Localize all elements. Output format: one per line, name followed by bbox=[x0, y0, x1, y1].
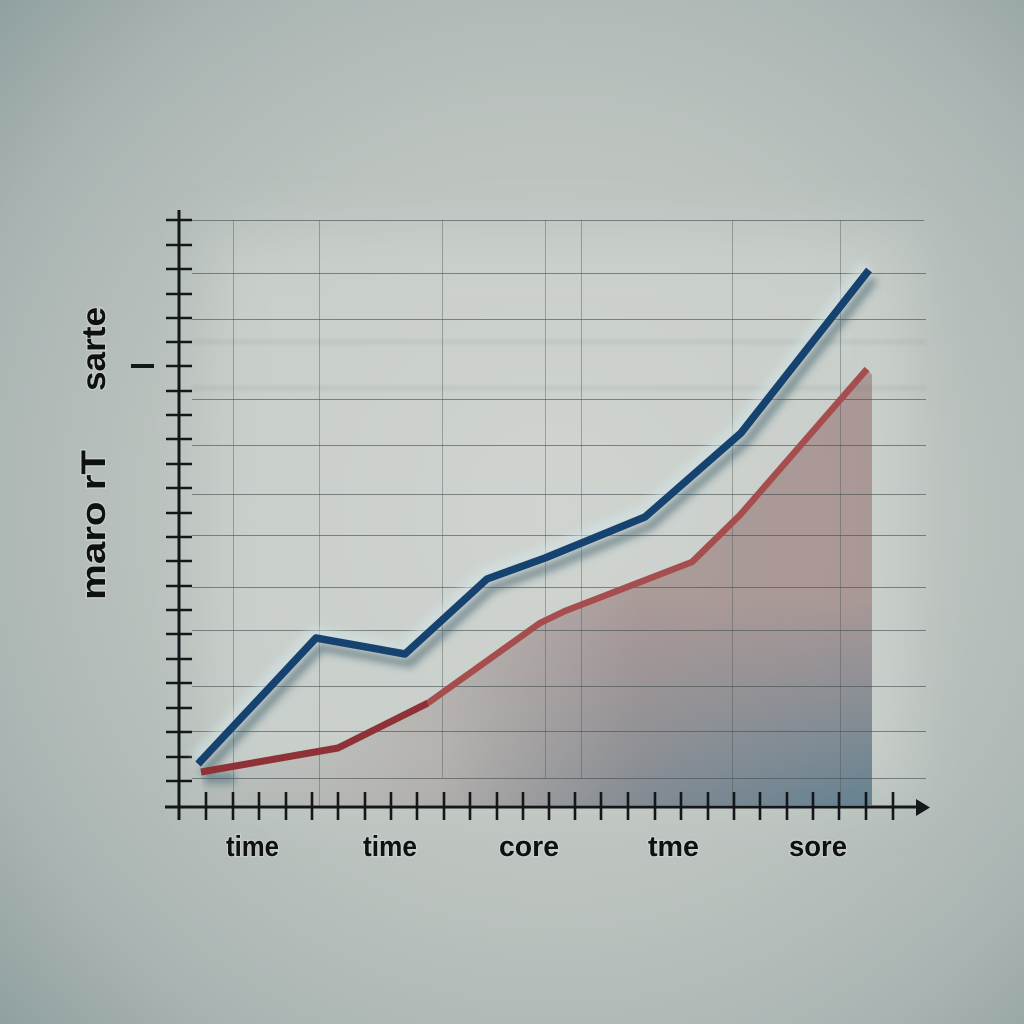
red data line bbox=[201, 369, 867, 772]
y axis marker dash bbox=[131, 364, 154, 368]
x axis with ticks and arrow bbox=[165, 792, 930, 820]
y axis label: sarte: sarte bbox=[75, 307, 112, 391]
blue line glow and shadow bbox=[195, 265, 874, 778]
x axis labels: tme bbox=[648, 831, 699, 863]
x axis labels: time bbox=[363, 831, 417, 863]
x axis labels: sore bbox=[789, 831, 847, 863]
x axis labels bbox=[226, 831, 847, 863]
y axis label: maro rT: maro rT bbox=[75, 450, 113, 600]
y axis with ticks bbox=[166, 210, 192, 820]
x axis labels: time bbox=[226, 831, 279, 863]
x axis labels: core bbox=[499, 831, 559, 863]
grid lines bbox=[192, 220, 926, 807]
blue data line bbox=[198, 270, 869, 764]
chart plot area bbox=[210, 235, 910, 795]
shaded area under red line bbox=[201, 369, 872, 805]
